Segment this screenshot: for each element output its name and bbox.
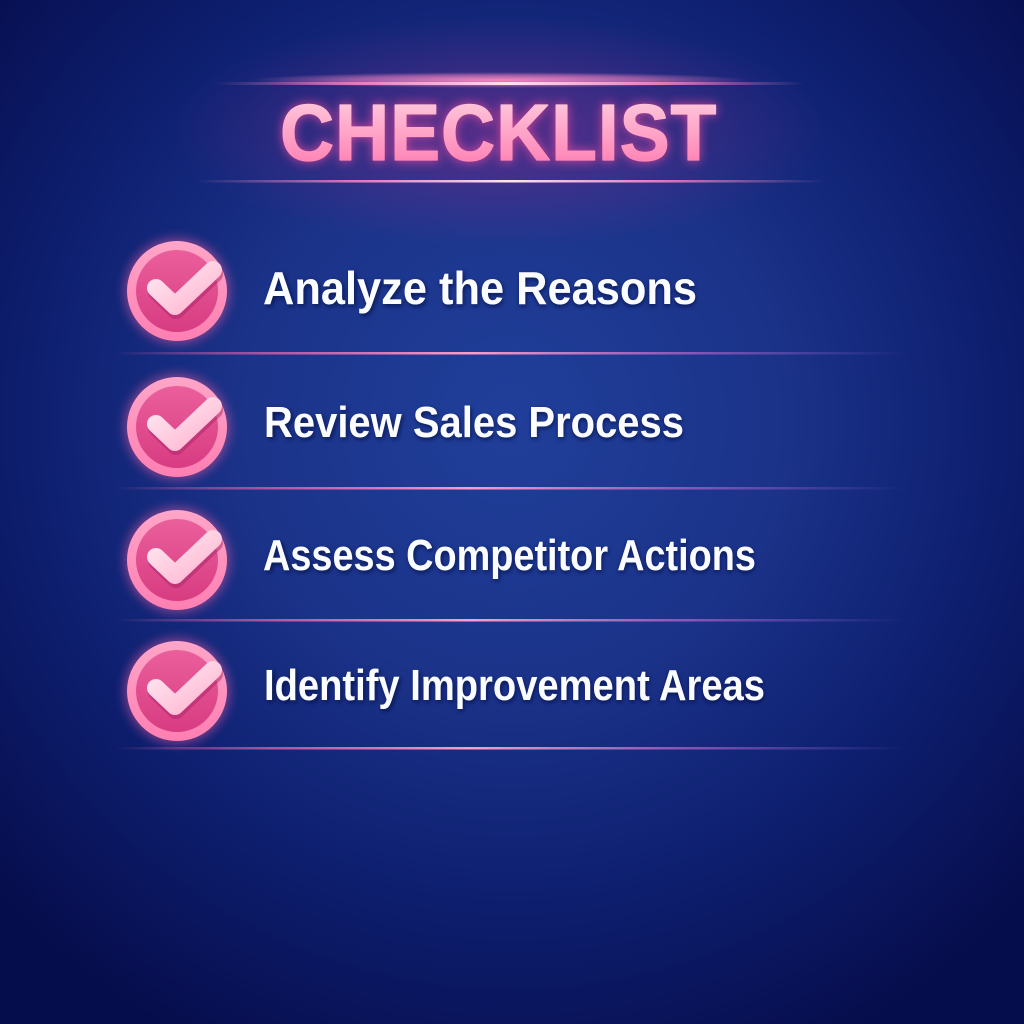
row 1 text: Analyze the Reasons [263,262,697,314]
row 1 divider [115,352,905,354]
row 4 divider [115,747,905,750]
row 1: Analyze the Reasons [124,238,697,344]
row 4 text: Identify Improvement Areas [264,661,765,710]
bottom title rule [195,180,825,182]
top title rule [215,72,805,88]
row 3 divider [115,619,905,622]
row 4: Identify Improvement Areas [124,638,765,744]
icon: check badge 1 [124,238,230,344]
row 4 text: Identify Improvement Areas [266,663,765,712]
row 3: Assess Competitor Actions [124,507,756,613]
row 2 divider [115,487,905,490]
row 3 text: Assess Competitor Actions [263,531,756,580]
title: CHECKLIST [280,89,717,178]
row 2 text: Review Sales Process [266,400,684,449]
row 3 text: Assess Competitor Actions [265,533,756,582]
row 2: Review Sales Process [124,374,684,480]
icon: check badge 2 [124,374,230,480]
row 1 text: Analyze the Reasons [265,264,697,316]
icon: check badge 3 [124,507,230,613]
icon: check badge 4 [124,638,230,744]
row 2 text: Review Sales Process [264,398,684,447]
title: CHECKLIST [280,89,717,178]
